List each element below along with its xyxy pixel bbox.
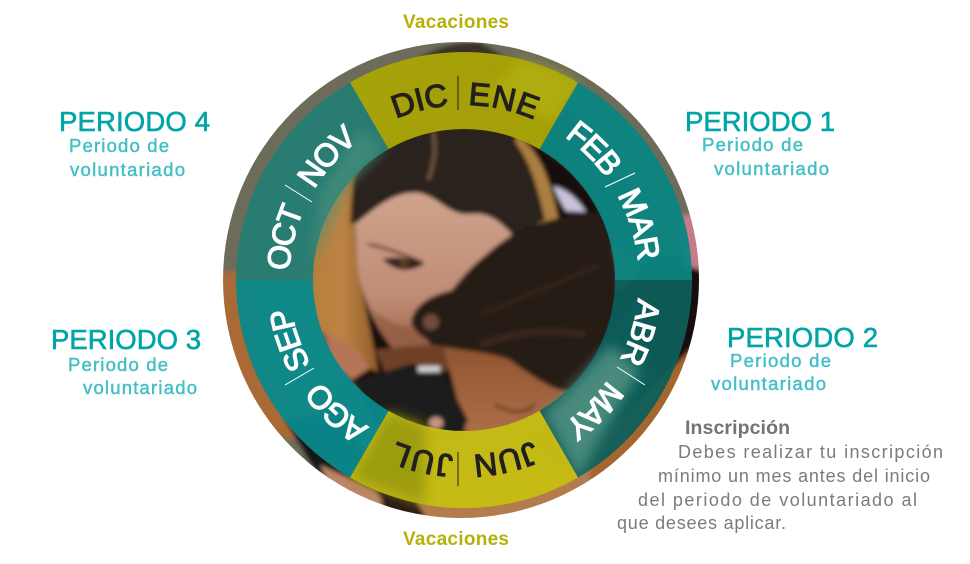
label: AGO: AGO (308, 386, 370, 440)
circular photo: woman and child with camera (220, 40, 705, 525)
text block: Periodo 2: voluntariado (711, 373, 826, 394)
text block: Periodo 3: voluntariado (83, 377, 197, 398)
label: NOV: NOV (296, 122, 352, 188)
text block: Periodo 4: Periodo de (69, 135, 169, 156)
text block: Inscripción: mínimo un mes antes del inicio (658, 466, 930, 486)
ring segment: FEB MAR (540, 82, 692, 280)
cheek shadow (372, 312, 428, 347)
woman hair (350, 120, 545, 234)
camera (353, 364, 468, 440)
text block: Periodo 3: PERIODO 3 (51, 324, 201, 355)
label: MAR: MAR (618, 187, 660, 262)
text block: Inscripción: Inscripción (685, 417, 790, 439)
text block: Periodo 4: voluntariado (70, 159, 185, 180)
text block: Periodo 2 (711, 322, 878, 394)
heading: Vacaciones bottom: Vacaciones (403, 529, 509, 550)
ring segment: ABR MAY (540, 280, 692, 478)
ring segment: OCT NOV (236, 82, 388, 280)
text block: Periodo 2: Periodo de (730, 350, 831, 371)
text block: Periodo 3: Periodo de (68, 354, 168, 375)
child hair (411, 213, 618, 392)
text block: Periodo 4: PERIODO 4 (59, 106, 210, 137)
woman face (355, 193, 512, 366)
brow, eye (368, 244, 423, 263)
hand (323, 330, 370, 380)
label: MAY: MAY (570, 382, 624, 442)
text block: Periodo 4 (59, 106, 210, 180)
text block: Periodo 1: voluntariado (714, 158, 829, 179)
text block: Periodo 1 (685, 106, 835, 179)
text block: Periodo 1: PERIODO 1 (685, 106, 835, 137)
label: SEP: SEP (270, 312, 308, 371)
inner photo base (312, 128, 616, 432)
text block: Inscripción: que desees aplicar. (617, 513, 786, 533)
child face (443, 345, 572, 436)
lavender background spot (553, 186, 586, 212)
neck shadow (375, 345, 470, 372)
text block: Inscripción (617, 417, 943, 533)
ring segment: DIC ENE vacation (350, 52, 580, 150)
label: FEB: FEB (566, 120, 620, 175)
ring segment: AGO SEP (236, 280, 388, 478)
text block: Periodo 2: PERIODO 2 (727, 322, 878, 353)
text block: Inscripción: Debes realizar tu inscripción (678, 442, 943, 462)
label: OCT: OCT (267, 202, 302, 269)
text block: Periodo 1: Periodo de (702, 134, 803, 155)
label: DIC: DIC (390, 84, 448, 118)
label: ENE: ENE (470, 82, 540, 120)
heading: Vacaciones top: Vacaciones (403, 12, 509, 33)
label: JUL: JUL (396, 441, 454, 477)
blonde hair (313, 172, 382, 375)
label: ABR: ABR (620, 297, 660, 366)
text block: Periodo 3 (51, 324, 201, 398)
label: JUN: JUN (474, 442, 536, 478)
ring segment: JUN JUL vacation (349, 406, 578, 510)
text block: Inscripción: del periodo de voluntariado al (638, 490, 917, 510)
